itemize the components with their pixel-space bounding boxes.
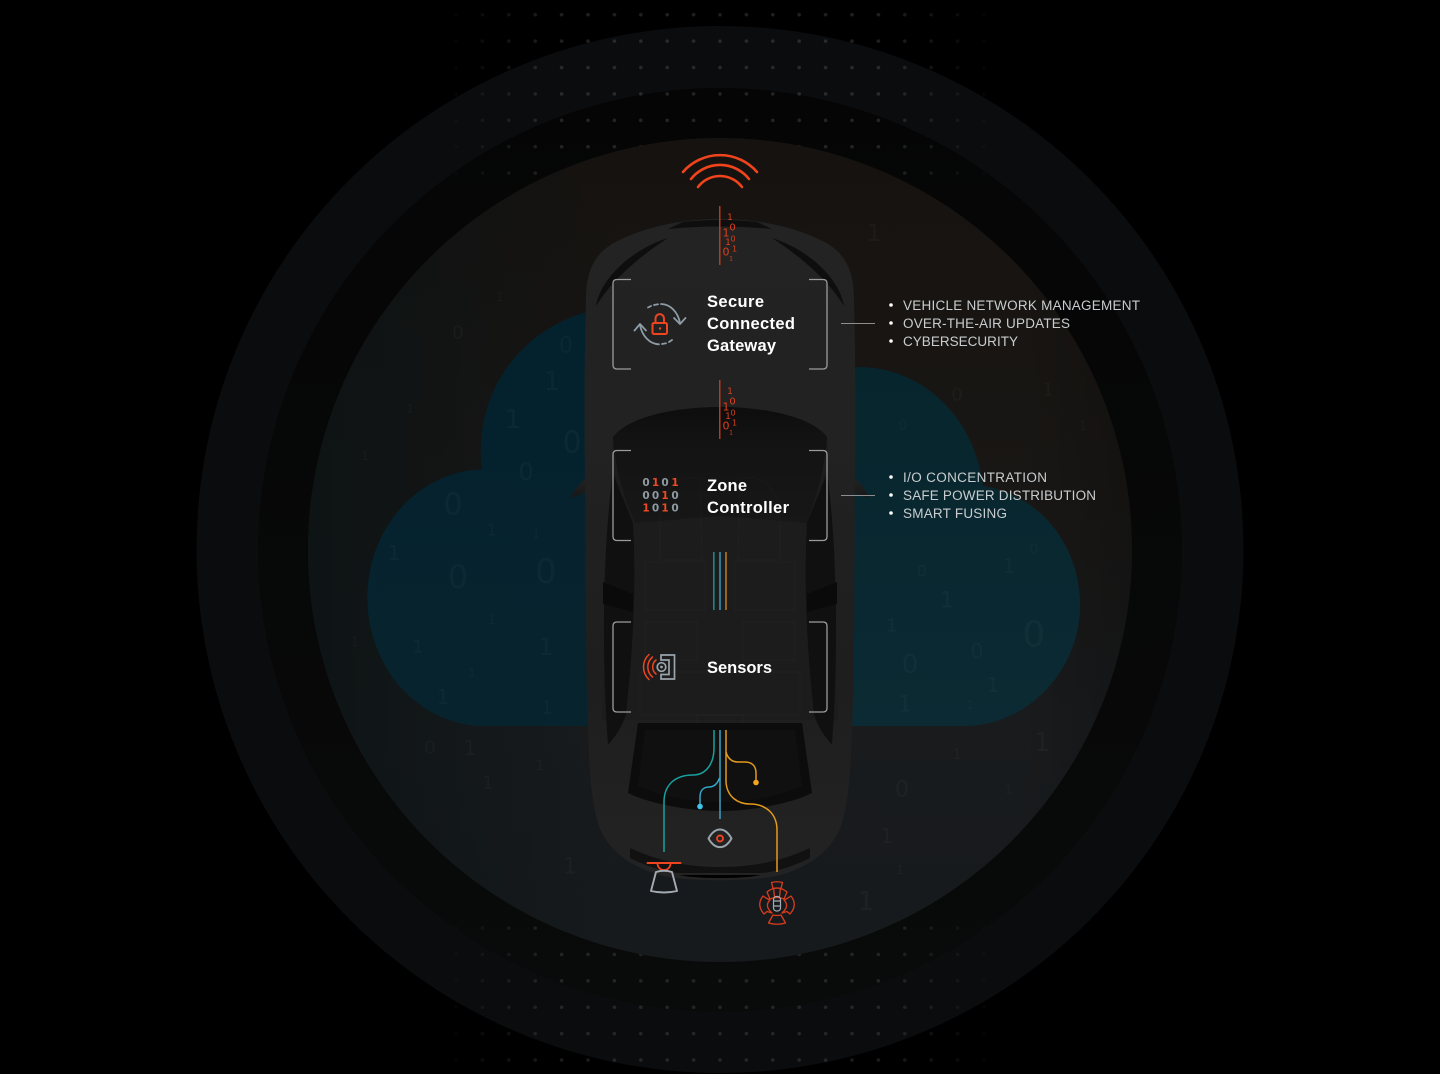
icon: binary grid: 0: [652, 502, 659, 514]
background binary digits: 1: [488, 612, 496, 628]
panel: zone controller: [613, 450, 827, 540]
binary data link: top: [719, 206, 737, 265]
background binary digits: 1: [953, 747, 961, 763]
background binary digits: 0: [902, 650, 918, 680]
binary data link: middle: 1: [729, 430, 733, 436]
rear window: [628, 723, 812, 811]
background binary digits: 1: [886, 616, 898, 636]
icon: binary grid: 1: [652, 477, 659, 489]
background binary digits: [351, 219, 1087, 917]
panel: secure connected gateway: Connected: [707, 315, 795, 333]
background binary digits: 1: [544, 367, 560, 397]
background binary digits: 1: [482, 772, 494, 794]
background binary digits: 0: [899, 418, 907, 434]
background binary digits: 1: [464, 736, 476, 760]
callout: zone controller features: [841, 470, 1096, 521]
bracket frame: [613, 622, 827, 712]
background binary digits: 0: [1030, 542, 1038, 558]
car mirrors: [571, 467, 869, 498]
background binary digits: 1: [538, 633, 554, 661]
background binary digits: 1: [536, 758, 544, 774]
background binary digits: 1: [881, 824, 893, 848]
background binary digits: 0: [443, 488, 463, 522]
icon: rear camera: [648, 863, 680, 892]
binary data link: middle: 0: [729, 396, 736, 408]
orange branch: [726, 752, 759, 785]
dot grid: [481, 13, 959, 1062]
binary data link: middle: 1: [722, 400, 730, 414]
panel: zone controller: Controller: [707, 499, 790, 517]
teal wire to rear camera: [664, 730, 714, 852]
wifi icon: [683, 155, 757, 187]
background binary digits: 1: [532, 527, 540, 541]
signal lines between zone controller and sensors: [713, 552, 727, 610]
background binary digits: 1: [563, 854, 577, 880]
binary data link: top: 0: [722, 246, 730, 258]
binary data link: top: 1: [727, 213, 733, 223]
orange wire to surround sensor: [726, 730, 777, 872]
binary data link: top: 1: [725, 238, 731, 248]
background binary digits: 1: [940, 588, 954, 614]
icon: binary grid: 0: [661, 477, 669, 489]
icon: binary grid: 0: [652, 490, 659, 502]
heading: Zone: [707, 477, 747, 495]
background binary digits: 1: [987, 673, 999, 697]
icon: binary grid: 1: [671, 477, 679, 489]
side window dark band: [603, 582, 837, 612]
icon: binary grid: [642, 477, 679, 514]
icon: lock with rotating arrows: [634, 304, 686, 344]
callout: gateway features: [841, 298, 1140, 349]
windshield: [613, 407, 827, 523]
seats: [640, 477, 800, 724]
binary data link: middle: 0: [730, 408, 736, 418]
hood vents: [596, 220, 844, 306]
background binary digits: 1: [406, 402, 414, 416]
background binary digits: 1: [505, 405, 521, 435]
blue wire to eye sensor: [719, 730, 721, 819]
background binary digits: 0: [448, 558, 468, 596]
background binary digits: 1: [412, 636, 424, 658]
background binary digits: 0: [971, 639, 983, 663]
icon: binary grid: 0: [671, 490, 679, 502]
binary data link: middle: 0: [722, 420, 730, 432]
bracket frame: [613, 450, 827, 540]
background binary digits: 1: [351, 635, 359, 649]
background binary digits: 0: [562, 426, 582, 460]
binary data link: middle: 1: [725, 412, 731, 422]
car, top view: [571, 219, 869, 880]
icon: binary grid: 1: [661, 502, 669, 514]
icon: binary grid: 1: [661, 490, 669, 502]
sensor wiring: [664, 730, 777, 872]
binary data link: middle: 1: [732, 418, 737, 428]
panel: secure connected gateway: Gateway: [707, 337, 777, 355]
background binary digits: 0: [559, 334, 573, 358]
background binary digits: 1: [1003, 554, 1015, 578]
side windows: [604, 472, 836, 745]
binary data link: top: 1: [732, 244, 737, 254]
icon: surround view sensor: [760, 882, 794, 924]
background binary digits: 0: [424, 738, 436, 758]
bracket frame: [613, 280, 827, 369]
background binary digits: 1: [496, 290, 504, 304]
heading: Sensors: [707, 659, 772, 677]
icon: binary grid: 0: [642, 490, 650, 502]
cloud: [367, 308, 1080, 726]
icon: sensor: [644, 654, 674, 680]
icon: binary grid: 1: [642, 502, 650, 514]
icon: binary grid: 0: [642, 477, 650, 489]
background binary digits: 1: [388, 541, 400, 565]
background binary digits: 1: [858, 887, 874, 917]
background binary digits: 0: [518, 458, 534, 486]
callout: gateway features: CYBERSECURITY: [903, 334, 1018, 349]
binary data link: top: 0: [729, 222, 736, 234]
background binary digits: 0: [951, 384, 963, 406]
cabin: [602, 407, 838, 720]
background binary digits: 1: [487, 520, 497, 540]
callout: zone controller features: SMART FUSING: [903, 506, 1007, 521]
background binary digits: 1: [1005, 783, 1013, 797]
callout: zone controller features: SAFE POWER DISTRIBUTION: [903, 488, 1096, 503]
panel: sensors: [613, 622, 827, 712]
blue branch: [697, 778, 720, 809]
binary data link: top: 1: [729, 256, 733, 262]
car body: [585, 219, 855, 880]
heading: Secure: [707, 293, 764, 311]
binary data link: top: 0: [730, 234, 736, 244]
background binary digits: 0: [535, 552, 557, 592]
background binary digits: 0: [917, 562, 927, 580]
background binary digits: 1: [468, 666, 476, 680]
background binary digits: 1: [866, 219, 882, 247]
background binary digits: 1: [1079, 419, 1087, 433]
binary data link: top: 1: [722, 226, 730, 240]
rear bumper: [630, 848, 810, 873]
background binary digits: 1: [1042, 380, 1054, 400]
background binary digits: 0: [1023, 614, 1045, 656]
background binary digits: 1: [437, 685, 449, 709]
background binary digits: 1: [1034, 728, 1050, 758]
background binary digits: 1: [541, 698, 553, 718]
callout: gateway features: OVER-THE-AIR UPDATES: [903, 316, 1070, 331]
background binary digits: 1: [898, 692, 912, 718]
panel: secure connected gateway: [613, 280, 827, 369]
background binary digits: 1: [966, 698, 974, 712]
icon: eye: [708, 830, 732, 847]
callout: zone controller features: I/O CONCENTRATION: [903, 470, 1047, 485]
background binary digits: 1: [896, 863, 904, 877]
binary data link: middle: [719, 380, 737, 439]
inner circle: [308, 138, 1132, 962]
icon: binary grid: 0: [671, 502, 679, 514]
background binary digits: 1: [361, 449, 369, 463]
background binary digits: 0: [452, 322, 464, 344]
binary data link: middle: 1: [727, 387, 733, 397]
callout: gateway features: VEHICLE NETWORK MANAGEMENT: [903, 298, 1140, 313]
background binary digits: 0: [895, 778, 909, 802]
